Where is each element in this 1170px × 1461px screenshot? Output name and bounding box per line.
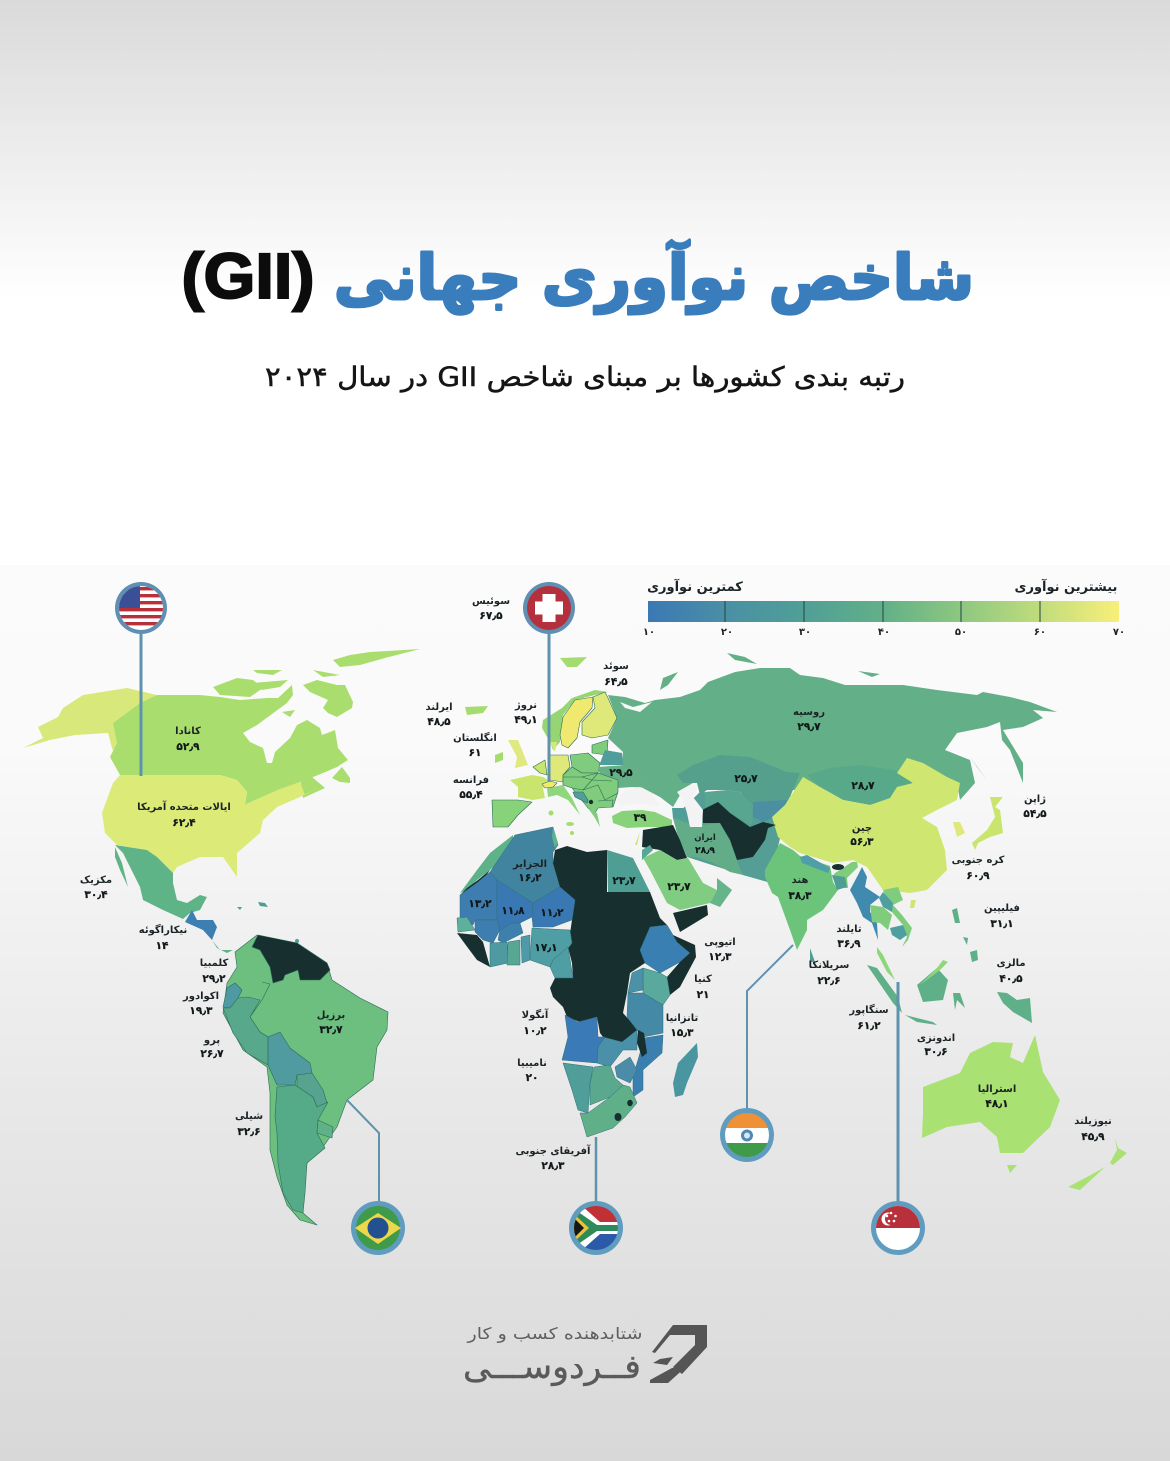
logo wordmark: فــردوســـی — [463, 1347, 641, 1386]
egypt — [607, 850, 650, 892]
label: peru: ۲۶٫۷ — [200, 1048, 224, 1060]
logo — [463, 1324, 707, 1386]
label: chile: شیلی — [235, 1111, 263, 1122]
africa — [457, 827, 698, 1137]
label: france: فرانسه — [453, 775, 489, 786]
label: malaysia — [996, 958, 1026, 985]
label: algeria: ۱۶٫۲ — [518, 872, 542, 884]
brazil connector — [347, 1100, 379, 1204]
label: japan: ۵۴٫۵ — [1023, 808, 1047, 820]
label: philippines — [984, 903, 1020, 930]
legend scale numbers: ۱۰ — [643, 627, 655, 638]
nepal — [800, 855, 830, 873]
label: sri lanka — [809, 960, 850, 987]
label: new zealand: ۴۵٫۹ — [1081, 1131, 1105, 1143]
label: angola: ۱۰٫۲ — [523, 1025, 547, 1037]
label: ireland: ۴۸٫۵ — [427, 716, 451, 728]
south korea — [953, 822, 965, 837]
label: namibia: نامیبیا — [517, 1058, 547, 1069]
label: japan — [1023, 794, 1047, 820]
label: brazil: ۳۲٫۷ — [319, 1024, 343, 1036]
kazakhstan — [677, 755, 800, 802]
australia — [922, 1035, 1060, 1153]
logo tagline: شتابدهنده کسب و کار — [466, 1324, 642, 1344]
label: namibia — [517, 1058, 547, 1084]
northeast india — [832, 862, 858, 888]
label: colombia — [200, 958, 228, 985]
label: colombia: کلمبیا — [200, 958, 228, 969]
benelux — [533, 760, 547, 775]
zimbabwe — [615, 1057, 637, 1083]
legend scale numbers: ۵۰ — [955, 627, 967, 638]
value: egypt: ۲۳٫۷ — [612, 875, 636, 887]
label: sri lanka: سریلانکا — [809, 960, 850, 971]
label: malaysia: مالزی — [996, 958, 1026, 969]
legend ticks — [725, 601, 1040, 622]
guinea — [475, 920, 500, 943]
label: sweden: ۶۴٫۵ — [604, 676, 628, 688]
mauritania — [460, 872, 497, 925]
uk — [508, 740, 528, 768]
label: france: ۵۵٫۴ — [459, 789, 483, 801]
label: mexico: مکزیک — [80, 875, 112, 886]
ukraine — [598, 765, 652, 788]
label: switzerland — [472, 596, 510, 622]
malawi — [637, 1030, 647, 1057]
taiwan — [910, 900, 916, 908]
label: ethiopia — [704, 937, 736, 963]
label: norway: نروژ — [514, 700, 537, 711]
value: nigeria: ۱۷٫۱ — [534, 942, 558, 954]
label: mexico — [80, 875, 112, 901]
finland — [582, 692, 617, 738]
southeast asia and oceania — [850, 867, 1127, 1190]
yemen — [673, 905, 708, 932]
flag: india — [720, 1108, 774, 1162]
china — [772, 758, 960, 893]
cameroon — [550, 947, 573, 978]
iceland — [465, 706, 488, 715]
poland — [570, 753, 600, 773]
label: singapore: سنگاپور — [848, 1003, 889, 1016]
mozambique — [633, 1035, 663, 1097]
montenegro — [589, 800, 593, 804]
philippines — [952, 908, 978, 962]
label: australia — [978, 1084, 1016, 1110]
label: tanzania — [666, 1013, 698, 1039]
label: iran: ایران — [694, 833, 716, 843]
label: thailand: تایلند — [836, 924, 862, 935]
algeria — [490, 827, 560, 903]
new zealand — [1068, 1138, 1127, 1190]
burkina faso — [498, 923, 523, 943]
tanzania — [627, 993, 663, 1037]
label: uk: انگلستان — [453, 731, 497, 744]
israel — [635, 832, 640, 845]
namibia — [563, 1063, 593, 1113]
jordan — [642, 845, 653, 860]
inland seas — [616, 783, 703, 827]
ghana — [507, 940, 520, 965]
north america — [23, 649, 420, 953]
turkey — [612, 810, 672, 828]
svalbard — [560, 657, 587, 667]
uzbekistan — [705, 790, 753, 825]
argentina — [275, 1085, 328, 1213]
russian arctic islands — [660, 653, 880, 690]
country labels — [80, 596, 1112, 1172]
flag: south africa — [569, 1201, 623, 1255]
label: russia: ۲۹٫۷ — [797, 721, 821, 733]
oman uae — [710, 878, 732, 907]
value: mali: ۱۱٫۸ — [501, 905, 525, 917]
flag: singapore — [871, 1201, 925, 1255]
belarus — [600, 750, 623, 765]
ethiopia — [640, 925, 690, 973]
label: japan: ژاپن — [1024, 794, 1046, 805]
bhutan — [832, 864, 844, 870]
label: colombia: ۲۹٫۲ — [202, 973, 226, 985]
flag: switzerland — [523, 582, 575, 634]
label: ethiopia: ۱۲٫۳ — [708, 951, 732, 963]
bangladesh — [832, 875, 847, 890]
legend scale numbers — [643, 627, 1125, 638]
label: canada — [175, 726, 201, 753]
legend high label: بیشترین نوآوری — [1015, 578, 1117, 595]
value: turkey: ۳۹ — [634, 812, 647, 824]
label: australia: ۴۸٫۱ — [985, 1098, 1009, 1110]
label: canada: کانادا — [175, 726, 201, 737]
somalia — [667, 935, 696, 995]
usa connector — [140, 632, 142, 776]
label: thailand — [836, 924, 862, 950]
label: nicaragua: نیکاراگوئه — [139, 923, 187, 936]
label: china — [850, 823, 874, 848]
thailand — [870, 905, 892, 930]
togo benin — [521, 935, 530, 963]
label: china: ۵۶٫۳ — [850, 836, 874, 848]
label: south korea — [952, 855, 1005, 882]
value: ukraine: ۲۹٫۵ — [609, 767, 633, 779]
label: brazil: برزیل — [317, 1010, 345, 1021]
senegal — [457, 917, 475, 932]
label: iran — [694, 833, 716, 856]
paraguay — [297, 1073, 327, 1107]
label: uk: ۶۱ — [469, 747, 481, 759]
legend low label: کمترین نوآوری — [647, 578, 743, 595]
label: kenya — [694, 974, 712, 1001]
label: chile — [235, 1111, 263, 1138]
baltics — [592, 740, 608, 755]
label: thailand: ۳۶٫۹ — [837, 938, 861, 950]
value: kazakhstan: ۲۵٫۷ — [734, 773, 758, 785]
mexico — [115, 845, 207, 919]
label: russia — [793, 707, 825, 733]
label: singapore — [848, 1003, 889, 1032]
vietnam — [883, 887, 912, 947]
south africa — [580, 1085, 637, 1137]
central europe internal borders — [563, 777, 592, 790]
label: ecuador: ۱۹٫۳ — [189, 1005, 213, 1017]
nova scotia — [300, 777, 325, 798]
greece — [588, 808, 600, 827]
sulawesi — [953, 993, 965, 1010]
germany — [550, 755, 570, 782]
switzerland connector — [548, 632, 550, 782]
label: namibia: ۲۰ — [526, 1072, 538, 1084]
label: uk — [453, 731, 497, 759]
mali — [497, 880, 533, 930]
label: russia: روسیه — [793, 707, 825, 718]
brazil chile colombia — [223, 935, 388, 1225]
caspian sea — [677, 783, 703, 827]
label: angola: آنگولا — [522, 1008, 549, 1021]
sakhalin — [970, 757, 987, 780]
label: south korea: کره جنوبی — [952, 855, 1005, 866]
label: china: چین — [852, 823, 872, 834]
central asia underlay — [673, 792, 790, 882]
label: ireland: ایرلند — [425, 702, 453, 713]
label: sweden: سوئد — [603, 661, 629, 672]
botswana — [590, 1065, 623, 1105]
label: kenya: ۲۱ — [697, 989, 709, 1001]
label: canada: ۵۲٫۹ — [176, 741, 200, 753]
legend gradient bar — [648, 601, 1119, 622]
label: south africa: آفریقای جنوبی — [516, 1144, 591, 1157]
caucasus — [672, 808, 687, 818]
new guinea — [997, 992, 1032, 1023]
label: south africa: ۲۸٫۳ — [541, 1160, 565, 1172]
south africa connector — [595, 1137, 597, 1204]
denmark — [550, 742, 557, 752]
venezuela guyana — [252, 935, 330, 983]
mongolia — [807, 765, 913, 805]
connector lines — [141, 632, 898, 1204]
flag: usa — [115, 582, 167, 634]
label: ireland — [425, 702, 453, 728]
france — [510, 775, 548, 800]
label: indonesia: اندونزی — [917, 1033, 955, 1044]
label: switzerland: ۶۷٫۵ — [479, 610, 503, 622]
singapore connector — [896, 982, 900, 1204]
flag: brazil — [351, 1201, 405, 1255]
china and east asia — [772, 758, 1003, 908]
white sea notch — [620, 702, 652, 712]
madagascar — [673, 1043, 698, 1097]
europe — [465, 657, 652, 835]
newfoundland — [332, 767, 350, 783]
subtitle: رتبه بندی کشورها بر مبنای شاخص GII در سال ۲۰۲۴ — [265, 362, 905, 393]
bolivia — [268, 1032, 312, 1085]
label: nicaragua: ۱۴ — [156, 940, 169, 952]
legend scale numbers: ۳۰ — [799, 627, 811, 638]
label: malaysia: ۴۰٫۵ — [999, 973, 1023, 985]
arctic islands — [213, 649, 420, 717]
label: new zealand — [1074, 1116, 1112, 1143]
russia and central asia — [608, 653, 1057, 882]
label: indonesia: ۳۰٫۶ — [924, 1046, 948, 1058]
label: usa: ۶۲٫۴ — [172, 817, 196, 829]
japan — [972, 797, 1003, 850]
sumatra — [867, 965, 902, 1013]
label: kenya: کنیا — [694, 974, 712, 985]
label: usa — [137, 800, 231, 829]
label: india: ۳۸٫۳ — [788, 890, 812, 902]
label: sweden — [603, 661, 629, 688]
logo icon — [650, 1325, 707, 1383]
uganda — [628, 968, 643, 993]
russia — [608, 668, 1057, 807]
sri lanka — [810, 948, 815, 962]
balkans — [573, 792, 588, 803]
label: indonesia — [917, 1033, 955, 1058]
label: australia: استرالیا — [978, 1084, 1016, 1095]
legend scale numbers: ۴۰ — [878, 627, 890, 638]
label: south africa — [516, 1144, 591, 1172]
tasmania — [1007, 1165, 1017, 1173]
label: iran: ۲۸٫۹ — [695, 846, 715, 856]
label: algeria: الجزایر — [512, 859, 547, 870]
middle east and south asia — [612, 802, 858, 962]
label: philippines: ۳۱٫۱ — [990, 918, 1014, 930]
usa — [102, 775, 320, 877]
iraq syria — [642, 825, 687, 860]
label: south korea: ۶۰٫۹ — [966, 870, 990, 882]
baja california — [115, 847, 128, 887]
label: singapore: ۶۱٫۲ — [857, 1020, 881, 1032]
ivory coast — [490, 942, 508, 967]
peru — [223, 997, 268, 1065]
label: peru: پرو — [203, 1035, 220, 1046]
guinea coast — [457, 933, 490, 967]
italy — [547, 785, 580, 815]
title: شاخص نوآوری جهانی — [334, 239, 974, 315]
label: ethiopia: اتیوپی — [704, 937, 736, 948]
ireland — [495, 752, 503, 763]
brazil colombia border — [250, 982, 270, 1037]
uruguay — [317, 1120, 333, 1138]
legend scale numbers: ۲۰ — [721, 627, 733, 638]
label: ecuador — [182, 991, 219, 1017]
morocco — [460, 835, 513, 893]
borneo — [917, 968, 948, 1002]
myanmar — [850, 867, 880, 940]
value: saudi arabia: ۲۳٫۷ — [667, 881, 691, 893]
india — [765, 843, 838, 950]
value: niger: ۱۱٫۲ — [540, 907, 564, 919]
label: new zealand: نیوزیلند — [1074, 1116, 1112, 1127]
india connector — [747, 945, 793, 1110]
malaysian borneo — [920, 960, 948, 985]
alaska — [23, 688, 157, 770]
spain portugal — [492, 800, 532, 827]
saudi arabia — [643, 850, 717, 910]
label: sri lanka: ۲۲٫۶ — [817, 975, 841, 987]
label: algeria — [512, 859, 547, 884]
black sea — [616, 787, 660, 807]
laos — [879, 892, 893, 912]
label: nicaragua — [139, 923, 187, 952]
label: france — [453, 775, 489, 801]
angola — [562, 1015, 605, 1063]
south america — [223, 935, 388, 1225]
pakistan — [737, 835, 778, 882]
label: angola — [522, 1008, 549, 1037]
eswatini — [627, 1100, 633, 1106]
title: (GII) — [182, 240, 314, 312]
legend scale numbers: ۷۰ — [1113, 627, 1125, 638]
label: india — [788, 875, 812, 902]
kyrgyzstan tajikistan — [753, 800, 788, 822]
niger — [532, 887, 575, 927]
canada — [110, 685, 348, 805]
ecuador — [223, 983, 242, 1008]
central america — [185, 910, 217, 940]
java — [905, 1015, 937, 1025]
kenya — [643, 968, 670, 1005]
label: india: هند — [792, 875, 808, 886]
tunisia — [552, 827, 558, 848]
nigeria — [530, 928, 572, 967]
legend — [643, 578, 1125, 638]
central europe — [563, 767, 618, 813]
label: philippines: فیلیپین — [984, 903, 1020, 914]
world map — [23, 649, 1127, 1225]
caribbean islands — [237, 902, 299, 943]
cambodia — [890, 925, 907, 940]
label: brazil — [317, 1010, 345, 1036]
label: usa: ایالات متحده آمریکا — [137, 800, 231, 813]
value: mauritania: ۱۳٫۲ — [468, 898, 492, 910]
malay peninsula — [877, 947, 895, 980]
label: tanzania: تانزانیا — [666, 1013, 698, 1024]
turkmenistan afghanistan — [702, 802, 776, 860]
libya sudan chad drc — [550, 846, 667, 1042]
lesotho — [614, 1113, 622, 1121]
label: switzerland: سوئیس — [472, 596, 510, 607]
sweden — [560, 697, 593, 748]
iran — [673, 818, 743, 875]
label: mexico: ۳۰٫۴ — [84, 889, 108, 901]
legend scale numbers: ۶۰ — [1034, 627, 1046, 638]
label: peru — [200, 1035, 224, 1060]
norway — [542, 690, 608, 750]
label: chile: ۳۲٫۶ — [237, 1126, 261, 1138]
label: norway — [514, 700, 538, 726]
label: norway: ۴۹٫۱ — [514, 714, 538, 726]
label: tanzania: ۱۵٫۳ — [670, 1027, 694, 1039]
switzerland — [542, 781, 557, 788]
label: ecuador: اکوادور — [182, 991, 219, 1002]
value: mongolia: ۲۸٫۷ — [851, 780, 875, 792]
western sahara — [460, 870, 490, 895]
mediterranean islands — [548, 810, 574, 835]
costa rica and panama — [212, 940, 233, 953]
zambia — [597, 1030, 637, 1067]
